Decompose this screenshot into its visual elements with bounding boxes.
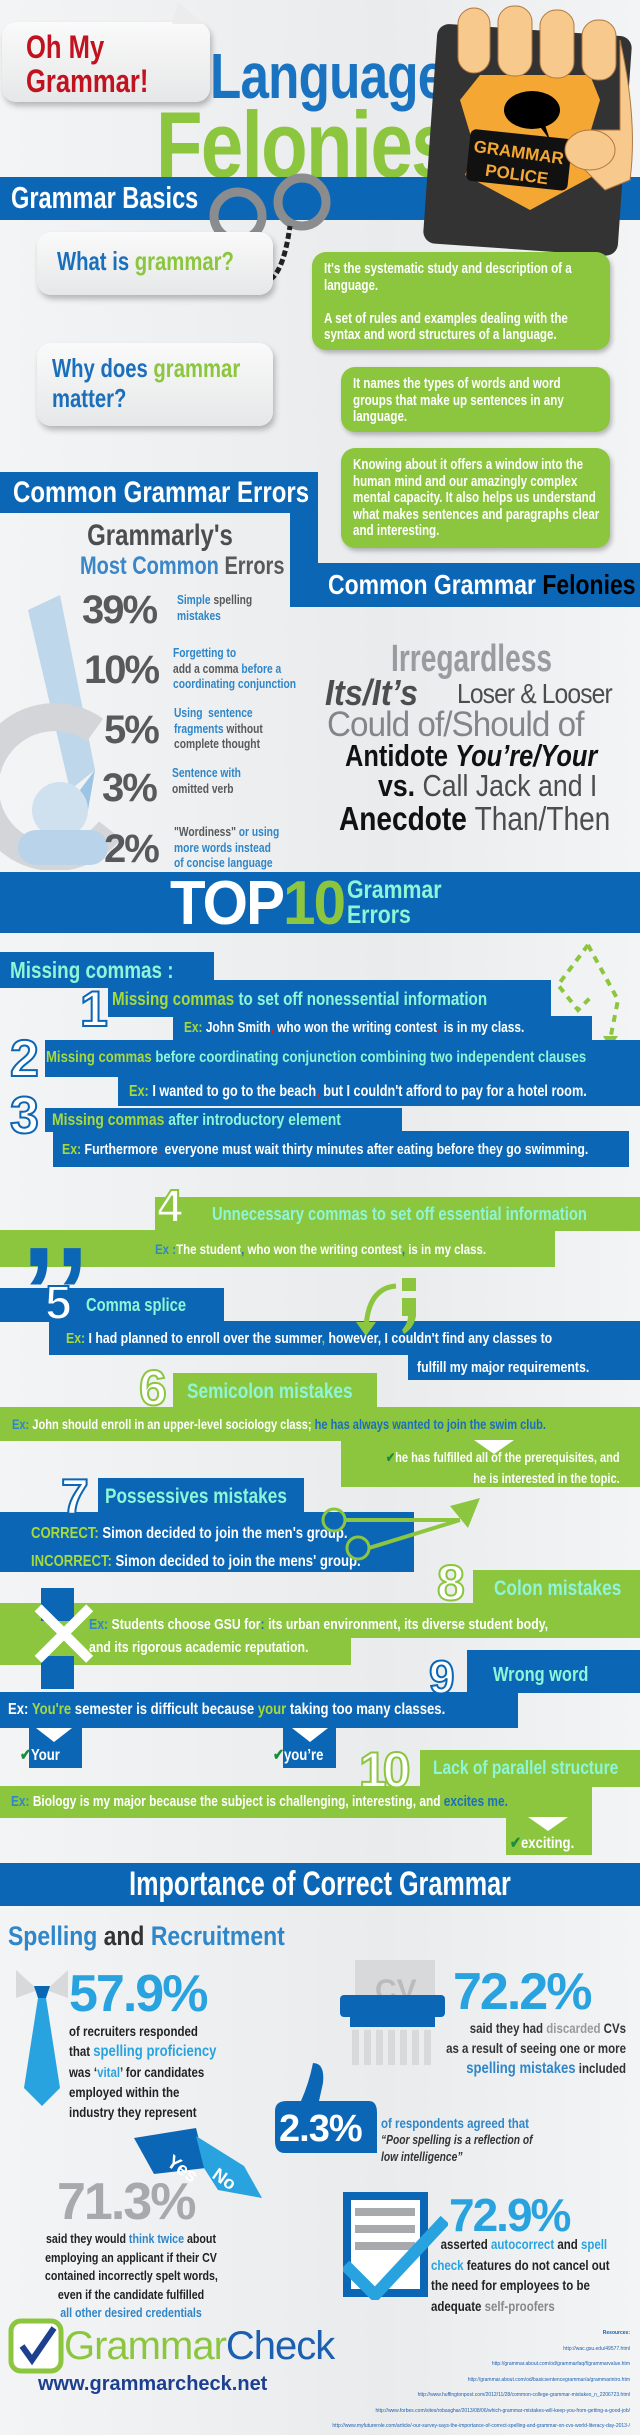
error 10 <box>0 1742 640 1855</box>
band: Importance of Correct Grammar <box>0 1863 640 1906</box>
logo: GrammarCheck: GrammarCheck <box>64 2324 334 2368</box>
bubble: Why does grammar matter?: matter? <box>52 383 126 413</box>
stat: 72.9% with document check icon: asserted autocorrect and spell <box>441 2236 607 2252</box>
error 8: and its rigorous academic reputation. <box>89 1639 308 1656</box>
icon: handcuffs <box>210 174 330 280</box>
text: resources: Resources: <box>603 2330 630 2336</box>
heading: Grammarly's Most Common Errors: Most Common Errors <box>80 552 284 580</box>
icon: crossed colon <box>41 1588 74 1621</box>
bubble: Knowing about it: Knowing about it offers a window into the human mind and our amazingly complex mental capacity. It also helps us understand what makes sentences and paragraphs clear and interesting. <box>353 457 599 539</box>
stat: 5%: Using sentence <box>174 706 253 720</box>
word cloud: common grammar felonies: Could of/Should of <box>327 705 583 744</box>
error 10: Lack of parallel structure <box>433 1758 618 1779</box>
dashed arrow icon <box>558 944 620 1040</box>
bubble: It names the types of words <box>341 367 610 432</box>
stat: 10%: 10% <box>84 648 158 692</box>
heading: Grammar Basics: Grammar Basics <box>11 180 198 215</box>
stat: 2%: more words instead <box>174 840 271 854</box>
stat: 72.2% with shredder icon: said they had discarded CVs <box>470 2020 626 2036</box>
icon: grammar police badge held by hand: GRAMMAR <box>473 137 565 168</box>
stat: 39%: 39% <box>82 588 156 632</box>
word cloud: common grammar felonies: Antidote You’re/Your <box>345 738 597 773</box>
band: Common Grammar Felonies: Common Grammar Felonies <box>328 569 636 600</box>
error 6: he is interested in the topic. <box>473 1471 620 1486</box>
error 2: 2 <box>10 1030 39 1088</box>
stat: 3% <box>102 766 241 810</box>
error 8: Colon mistakes <box>494 1577 621 1600</box>
error 5: fulfill my major requirements. <box>417 1359 589 1376</box>
error 6: Ex: John should enroll in an upper-level sociology class; he has always wanted to join the swim club. <box>12 1417 546 1432</box>
stat: 57.9% with tie icon: of recruiters responded <box>69 2023 198 2039</box>
stat: 2.3% thumbs up: 2.3% <box>279 2108 362 2150</box>
word cloud: common grammar felonies: Irregardless <box>391 638 552 680</box>
band: TOP 10 Grammar Errors <box>0 872 640 933</box>
icon: grammar police badge held by hand <box>423 6 633 256</box>
error 10: ✔exciting. <box>510 1835 574 1852</box>
error 9: ✔you’re <box>273 1747 323 1764</box>
heading: Grammarly's Most Common Errors: Grammarly's <box>87 519 233 552</box>
bubble: It names the types of words: It names the types of words and word groups that make up sentences in any language. <box>353 376 564 425</box>
error 4: Ex :The student, who won the writing contest, is in my class. <box>155 1241 486 1257</box>
error 3 <box>10 1087 629 1167</box>
error 5: 5 <box>45 1277 72 1330</box>
stat: 10%: add a comma before a <box>173 662 281 676</box>
stat: 72.9% with document check icon: check features do not cancel out <box>431 2256 610 2272</box>
decorative pencil/G icon <box>0 595 118 870</box>
error 3: 3 <box>10 1087 39 1145</box>
error 7 <box>0 1469 480 1572</box>
error 6 <box>0 1360 640 1487</box>
error 1: Ex: John Smith, who won the writing contest, is in my class. <box>184 1020 524 1036</box>
stat: 3%: omitted verb <box>172 782 234 796</box>
speech bubble: Oh My Grammar! <box>2 22 210 102</box>
error 10: 10 <box>359 1742 407 1798</box>
stat: 71.3% with Yes/No sign: even if the candidate fulfilled <box>58 2286 204 2302</box>
error 1: Missing commas to set off nonessential information <box>112 988 487 1009</box>
logo: GrammarCheck: www.grammarcheck.net <box>38 2373 267 2395</box>
title: Felonies: Felonies <box>156 92 452 197</box>
error 6: 6 <box>139 1360 167 1416</box>
bubble: It's the systematic study <box>312 252 610 350</box>
stat: 71.3% with Yes/No sign: 71.3% <box>57 2173 194 2231</box>
error 10: Ex: Biology is my major because the subject is challenging, interesting, and excites me. <box>11 1794 508 1810</box>
stat: 57.9% with tie icon: was ‘vital’ for candidates <box>69 2064 204 2080</box>
bubble: It's the systematic study: A set of rules and examples dealing with the syntax and word structures of a language. <box>324 310 568 343</box>
logo: GrammarCheck <box>8 2318 336 2395</box>
stat: 71.3% with Yes/No sign <box>45 2128 262 2320</box>
stat: 5%: complete thought <box>174 737 260 751</box>
stat: 5%: 5% <box>104 708 158 752</box>
error 8 <box>0 1555 640 1692</box>
stat: 2.3% thumbs up <box>275 2063 534 2164</box>
error 5: Ex: I had planned to enroll over the summer, however, I couldn't find any classes to <box>66 1330 552 1347</box>
stat: 57.9% with tie icon <box>16 1965 216 2120</box>
error 4: 4 <box>157 1180 183 1232</box>
word cloud: common grammar felonies <box>325 638 612 837</box>
error 2 <box>10 1030 640 1106</box>
stat: 2%: of concise language <box>174 856 273 870</box>
tab: Missing commas <box>0 952 214 988</box>
error 1 <box>80 980 592 1040</box>
error 4 <box>0 1158 640 1292</box>
error 3: Ex: Furthermore, everyone must wait thirty minutes after eating before they go swimming. <box>62 1141 588 1158</box>
title: Language: Language <box>210 40 445 112</box>
stat: 72.9% with document check icon <box>343 2189 610 2314</box>
text: all other desired credentials <box>60 2305 202 2320</box>
band: TOP 10 Grammar Errors: TOP10 <box>170 869 344 938</box>
text: resources: http://www.myfuturerole.com/article/-our-survey-says-the-importance-of-correct-spelling-and-grammar-on-cvs-world-literacy-day-2013-/ <box>332 2423 630 2429</box>
stat: 3%: 3% <box>102 766 156 810</box>
title: Oh My Grammar: Oh My <box>26 29 104 65</box>
band: Grammar Basics <box>0 177 640 220</box>
bubble: Why does grammar matter? <box>37 343 273 426</box>
error 5 <box>0 1277 640 1380</box>
error 7: INCORRECT: Simon decided to join the mens' group. <box>31 1553 361 1570</box>
word cloud: common grammar felonies: Loser & Looser <box>457 678 612 709</box>
stat: 72.2% with shredder icon <box>340 1960 626 2077</box>
stat: 39%: mistakes <box>177 608 221 622</box>
stat: 72.9% with document check icon: the need for employees to be <box>431 2277 590 2293</box>
bubble: It's the systematic study: It's the systematic study and description of a language. <box>324 261 572 294</box>
bubble tail <box>172 2 204 24</box>
error 6: Semicolon mistakes <box>187 1380 353 1403</box>
error 7: 7 <box>61 1469 89 1525</box>
stat: 10%: coordinating conjunction <box>173 677 296 691</box>
icon: grammar police badge held by hand: POLICE <box>484 161 549 188</box>
error 8: 8 <box>437 1555 465 1611</box>
icon: big commas: ,, <box>22 1158 89 1292</box>
stat: 71.3% with Yes/No sign: said they would think twice about <box>46 2231 216 2246</box>
error 1: 1 <box>80 981 108 1037</box>
connector band <box>290 510 318 570</box>
text: resources: http://grammar.about.com/od/grammarfaq/f/grammarvalue.htm <box>492 2361 630 2367</box>
bubble: What is grammar?: What is grammar? <box>57 246 234 276</box>
title: Oh My Grammar: Grammar! <box>26 63 148 99</box>
error 2: Ex: I wanted to go to the beach, but I couldn't afford to pay for a hotel room. <box>129 1083 587 1100</box>
stat: 5% <box>104 706 263 752</box>
stat: 71.3% with Yes/No sign: Yes <box>163 2151 201 2187</box>
error 9: 9 <box>429 1651 455 1703</box>
stat: 57.9% with tie icon: employed within the <box>69 2084 179 2100</box>
text: resources: http://wac.gsu.edu/49577.html <box>563 2346 630 2352</box>
bubble: Why does grammar matter?: Why does grammar <box>52 353 240 383</box>
error 8: Ex: Students choose GSU for: its urban environment, its diverse student body, <box>89 1616 548 1633</box>
stat: 2%: 2% <box>104 827 158 871</box>
heading: Grammarly's Most Common Errors <box>80 519 284 580</box>
error 6: ✔he has fulfilled all of the prerequisites, and <box>386 1450 620 1465</box>
heading: Spelling and Recruitment: Spelling and Recruitment <box>8 1921 285 1951</box>
band: Common Grammar Errors: Common Grammar Errors <box>13 476 309 509</box>
text: resources: http://www.huffingtonpost.com/2012/11/28/common-college-grammar-mistakes_n_2206723.html <box>418 2392 630 2398</box>
error 3: Missing commas after introductory element <box>52 1110 341 1129</box>
error 9 <box>0 1650 640 1768</box>
stat: 71.3% with Yes/No sign: contained incorrectly spelt words, <box>45 2268 218 2283</box>
stat: 71.3% with Yes/No sign: No <box>209 2164 240 2194</box>
band: Importance of Correct Grammar: Importance of Correct Grammar <box>129 1865 511 1903</box>
stat: 72.9% with document check icon: 72.9% <box>449 2189 569 2241</box>
stat: 71.3% with Yes/No sign: employing an applicant if their CV <box>45 2250 217 2264</box>
text: resources: http://www.forbes.com/sites/robasghar/2013/08/06/which-grammar-mistakes-will-keep-you-from-getting-a-good-job/ <box>375 2408 630 2414</box>
error 9: ✔Your <box>20 1747 60 1764</box>
stat: 2% <box>104 825 279 871</box>
stat: 39% <box>82 588 252 632</box>
stat: 57.9% with tie icon: that spelling proficiency <box>69 2043 216 2060</box>
title: Oh My Grammar <box>26 29 148 99</box>
text: resources <box>332 2330 630 2429</box>
error 9: Wrong word <box>493 1664 588 1686</box>
text: adequate self-proofers <box>431 2298 555 2314</box>
error 7: CORRECT: Simon decided to join the men's group. <box>31 1525 348 1542</box>
stat: 72.2% with shredder icon: as a result of seeing one or more <box>446 2040 626 2056</box>
stat: 39%: Simple spelling <box>177 593 252 607</box>
stat: 57.9% with tie icon: 57.9% <box>69 1965 206 2023</box>
band: TOP 10 Grammar Errors: Grammar <box>347 876 441 904</box>
error 7: Possessives mistakes <box>105 1485 287 1508</box>
stat: 2.3% thumbs up: low intelligence” <box>381 2150 462 2164</box>
stat: 72.2% with shredder icon: CV <box>375 1974 417 2007</box>
stat: 2.3% thumbs up: “Poor spelling is a reflection of <box>381 2133 533 2147</box>
tab: Missing commas: Missing commas : <box>10 957 174 983</box>
bubble: What is grammar? <box>37 232 273 295</box>
word cloud: common grammar felonies: vs. Call Jack and I <box>378 768 597 803</box>
word cloud: common grammar felonies: Anecdote Than/Then <box>339 800 610 837</box>
text: industry they represent <box>69 2104 197 2120</box>
icon: green arrow lines <box>322 1498 480 1560</box>
icon: semicolon arrow <box>356 1278 416 1336</box>
word cloud: common grammar felonies: Its/It’s <box>325 672 418 713</box>
stat: 2.3% thumbs up: of respondents agreed that <box>381 2115 529 2131</box>
stat: 3%: Sentence with <box>172 766 241 780</box>
band: TOP 10 Grammar Errors: Errors <box>347 901 411 929</box>
text: resources: http://grammar.about.com/od/basicsentencegrammar/a/grammarintro.htm <box>468 2376 630 2382</box>
error 9: Ex: You're semester is difficult because your taking too many classes. <box>8 1701 445 1718</box>
stat: 72.2% with shredder icon: 72.2% <box>453 1963 590 2021</box>
stat: 10% <box>84 646 296 692</box>
stat: 2%: "Wordiness" or using <box>174 825 279 839</box>
stat: 5%: fragments without <box>174 722 263 736</box>
error 4: Unnecessary commas to set off essential information <box>212 1204 587 1224</box>
stat: 10%: Forgetting to <box>173 646 236 660</box>
icon: down arrow <box>474 1440 514 1454</box>
error 8: ✕ <box>22 1580 106 1692</box>
error 2: Missing commas before coordinating conjunction combining two independent clauses <box>46 1049 586 1066</box>
stat: 72.2% with shredder icon: spelling mistakes included <box>466 2060 626 2077</box>
band: Common Grammar Felonies <box>290 563 640 607</box>
error 5: Comma splice <box>86 1295 186 1315</box>
